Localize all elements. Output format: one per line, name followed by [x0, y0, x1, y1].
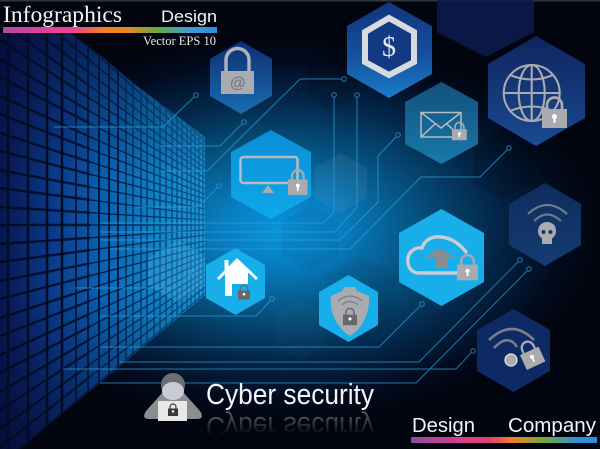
footer rainbow bar [411, 437, 597, 443]
hexagon: shield lock [319, 275, 378, 342]
footer: Design: Design [412, 415, 475, 437]
hexagon: skull wifi [509, 183, 581, 266]
header: Design: Design [161, 7, 217, 26]
hexagon: cloud upload lock [399, 209, 484, 306]
header: Infographics: Infographics [3, 2, 122, 28]
hexagon: wifi lock [477, 309, 550, 392]
hexagon: dollar [347, 2, 432, 98]
subheading: Vector EPS 10: Vector EPS 10 [143, 34, 216, 48]
top dark hexagon [437, 0, 534, 57]
circuit lines [54, 77, 531, 383]
faint background hexagons [275, 45, 532, 360]
footer: Company: Company [508, 415, 596, 437]
hexagon: dollar: $ [382, 32, 396, 63]
perspective grid wall [0, 0, 207, 449]
hacker icon [144, 373, 202, 421]
hexagon: email lock: @ [230, 75, 245, 92]
hexagon: globe lock [488, 36, 585, 146]
hexagon: monitor lock [231, 130, 311, 219]
header rainbow bar [3, 27, 217, 33]
title: Cyber security: Cyber security [206, 379, 374, 411]
hexagon: home lock [206, 248, 265, 315]
hexagon: email lock [210, 41, 272, 114]
title reflection: Cyber security [206, 410, 374, 442]
hexagon: mail lock [405, 82, 478, 164]
